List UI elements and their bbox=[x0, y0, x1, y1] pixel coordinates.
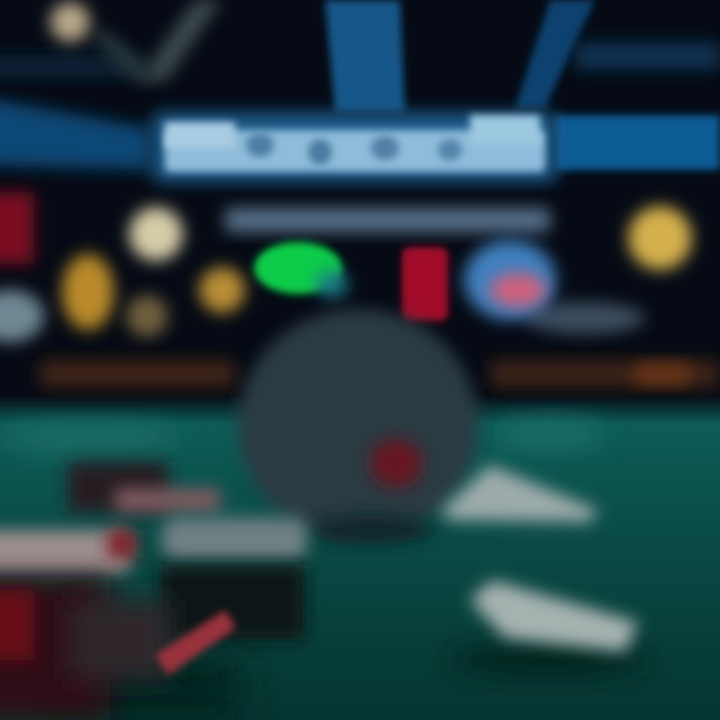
chip stacks bbox=[0, 462, 307, 720]
table felt bbox=[0, 395, 720, 720]
room lights bbox=[0, 2, 692, 342]
background: dark room bbox=[0, 0, 720, 420]
shelf counter bbox=[40, 360, 720, 388]
playing cards bbox=[440, 465, 648, 676]
ceiling beams bbox=[0, 0, 720, 170]
coloured signs bbox=[254, 240, 556, 321]
large chip: grey disc bbox=[238, 309, 478, 544]
banner: blurred heading bbox=[152, 112, 557, 232]
